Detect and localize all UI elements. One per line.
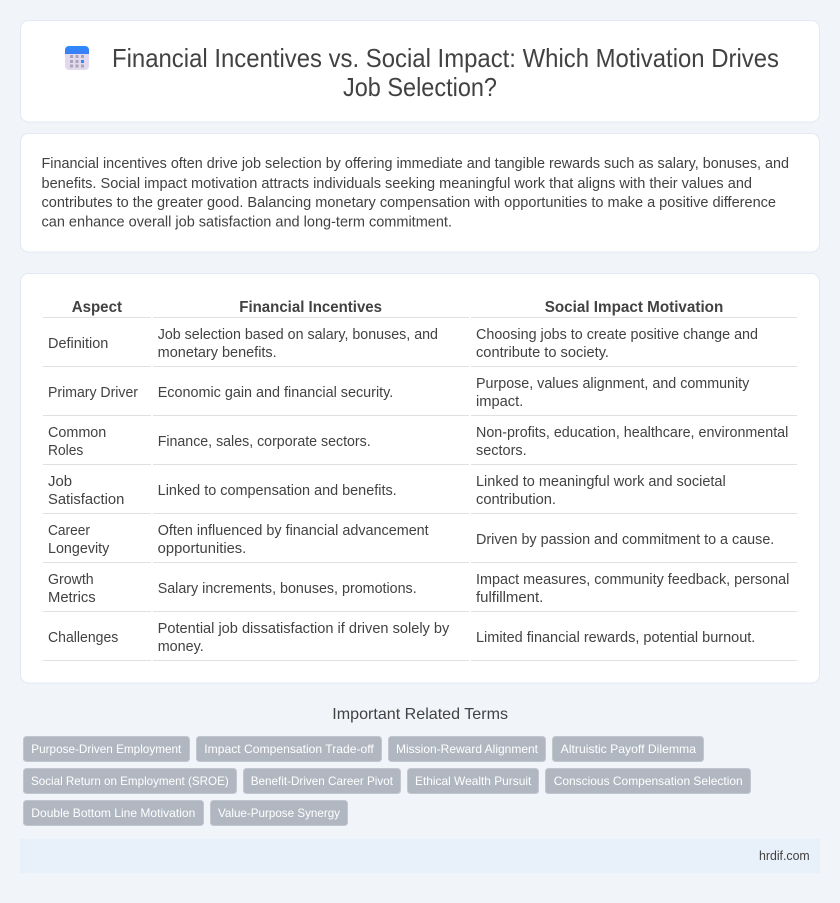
tag: benefit-driven career pivot: Benefit-Driven Career Pivot	[251, 774, 394, 788]
tag: conscious compensation selection	[546, 768, 750, 794]
panel: introduction	[20, 134, 820, 252]
panel: title header	[20, 20, 820, 122]
tag: value-purpose synergy: Value-Purpose Synergy	[218, 806, 340, 820]
tag: impact compensation trade-off	[196, 736, 382, 762]
row: primary driver: Primary Driver	[48, 385, 138, 401]
title	[112, 45, 779, 102]
row: growth metrics: Salary increments, bonuses, promotions.	[158, 581, 417, 597]
panel: comparison table	[20, 274, 820, 683]
tag: value-purpose synergy	[210, 800, 348, 826]
footer bar	[20, 839, 820, 873]
tag: impact compensation trade-off: Impact Compensation Trade-off	[204, 742, 374, 756]
tag: mission-reward alignment: Mission-Reward Alignment	[396, 742, 539, 756]
row: definition: Job selection based on salary, bonuses, and	[158, 327, 438, 343]
table header row: Aspect	[72, 299, 123, 316]
row: growth metrics: Metrics	[48, 590, 96, 606]
title: Financial Incentives vs. Social Impact: Which Motivation Drives	[112, 45, 779, 73]
intro paragraph: Financial incentives often drive job selection by offering immediate and tangible rewards such as salary, bonuses, and	[42, 156, 789, 172]
row: common roles: Common	[48, 425, 106, 441]
intro paragraph: benefits. Social impact motivation attracts individuals seeking meaningful work that aligns with their values and	[42, 176, 752, 192]
row: challenges: Limited financial rewards, potential burnout.	[476, 630, 755, 646]
row: common roles: Roles	[48, 443, 83, 459]
panel: related terms	[24, 706, 750, 826]
footer source label: hrdif.com	[759, 848, 810, 863]
tag: altruistic payoff dilemma: Altruistic Payoff Dilemma	[561, 742, 696, 756]
row: primary driver: impact.	[476, 394, 523, 410]
icon: calendar	[65, 46, 89, 70]
tag: purpose-driven employment: Purpose-Driven Employment	[31, 742, 182, 756]
tag: conscious compensation selection: Conscious Compensation Selection	[554, 774, 743, 788]
intro paragraph: contributes to the greater good. Balancing monetary compensation with opportunities to make a positive difference	[42, 195, 776, 211]
tag: mission-reward alignment	[388, 736, 546, 762]
row: common roles	[43, 425, 797, 465]
row: job satisfaction: Job	[48, 474, 72, 490]
table header row: Financial Incentives	[239, 299, 382, 316]
row: common roles: Finance, sales, corporate sectors.	[158, 434, 371, 450]
row: career longevity: Driven by passion and commitment to a cause.	[476, 532, 774, 548]
tag: ethical wealth pursuit: Ethical Wealth Pursuit	[415, 774, 532, 788]
row: career longevity: Career	[48, 523, 90, 539]
intro paragraph	[42, 156, 789, 230]
row: career longevity: Longevity	[48, 541, 110, 557]
tag: ethical wealth pursuit	[408, 768, 538, 794]
row: challenges: money.	[158, 639, 204, 655]
row: challenges: Potential job dissatisfaction if driven solely by	[158, 621, 450, 637]
row: common roles: sectors.	[476, 443, 527, 459]
row: common roles: Non-profits, education, healthcare, environmental	[476, 425, 788, 441]
row: primary driver	[43, 376, 797, 416]
table header row: Social Impact Motivation	[545, 299, 723, 316]
row: career longevity	[43, 523, 797, 563]
row: primary driver: Economic gain and financial security.	[158, 385, 393, 401]
row: job satisfaction: Linked to meaningful work and societal	[476, 474, 726, 490]
row: growth metrics	[43, 572, 797, 612]
row: job satisfaction: Satisfaction	[48, 492, 124, 508]
row: primary driver: Purpose, values alignment, and community	[476, 376, 750, 392]
tag: social return on employment	[24, 768, 236, 794]
row: career longevity: Often influenced by financial advancement	[158, 523, 429, 539]
row: challenges	[43, 621, 797, 661]
tag: altruistic payoff dilemma	[552, 736, 704, 762]
table header row	[43, 299, 797, 318]
tag: double bottom line motivation: Double Bottom Line Motivation	[31, 806, 195, 820]
row: growth metrics: fulfillment.	[476, 590, 543, 606]
tag: social return on employment: Social Return on Employment (SROE)	[31, 774, 229, 788]
row: definition	[43, 327, 797, 367]
row: growth metrics: Growth	[48, 572, 94, 588]
row: job satisfaction: contribution.	[476, 492, 556, 508]
row: definition: contribute to society.	[476, 345, 609, 361]
row: definition: monetary benefits.	[158, 345, 277, 361]
row: job satisfaction: Linked to compensation and benefits.	[158, 483, 397, 499]
row: career longevity: opportunities.	[158, 541, 246, 557]
row: challenges: Challenges	[48, 630, 118, 646]
title: Job Selection?	[343, 74, 497, 102]
heading: important related terms: Important Related Terms	[332, 706, 508, 723]
row: definition: Definition	[48, 336, 108, 352]
row: definition: Choosing jobs to create positive change and	[476, 327, 758, 343]
tag: benefit-driven career pivot	[244, 768, 400, 794]
tag: double bottom line motivation	[24, 800, 204, 826]
intro paragraph: can enhance overall job satisfaction and long-term commitment.	[42, 214, 452, 230]
tag: purpose-driven employment	[24, 736, 190, 762]
row: job satisfaction	[43, 474, 797, 514]
row: growth metrics: Impact measures, community feedback, personal	[476, 572, 789, 588]
